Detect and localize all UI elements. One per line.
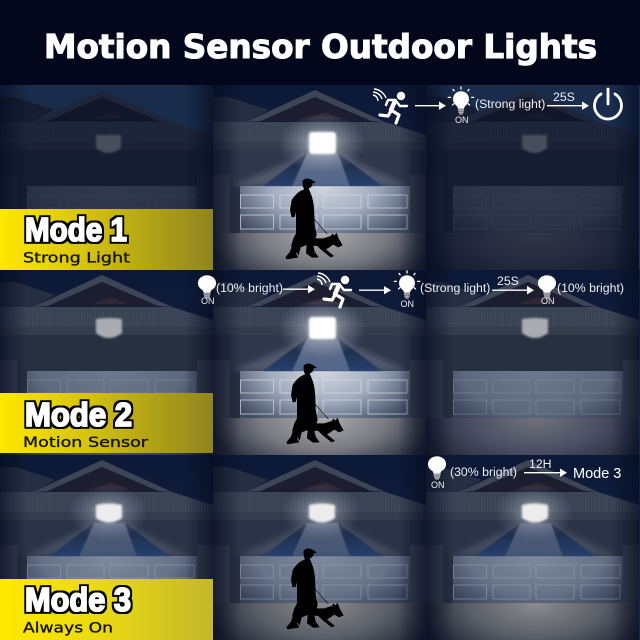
- arrow 12H: [524, 457, 567, 477]
- panel: mode 3 scene centre: [213, 455, 426, 640]
- mode 2 subtitle: Motion Sensor: [23, 435, 148, 451]
- icon: motion runner: [373, 89, 407, 123]
- arrow: [359, 286, 391, 294]
- arrow 25S: 25S: [553, 90, 575, 104]
- panel: mode 2 scene dim again: [426, 270, 640, 455]
- mode 3 subtitle: Always On: [23, 620, 113, 636]
- icon: bulb dim: [538, 275, 556, 298]
- panel: mode 3 scene right: [426, 455, 640, 640]
- label: 10% bright: (10% bright): [557, 281, 624, 295]
- banner: mode 3: [0, 579, 213, 640]
- label: on: ON: [400, 299, 414, 309]
- label: mode 3: Mode 3: [573, 466, 621, 482]
- icon: power: [594, 89, 622, 119]
- arrow 12H: 12H: [529, 457, 552, 471]
- arrow 25S: [547, 90, 589, 110]
- label: 10% bright: (10% bright): [216, 281, 283, 295]
- panel: mode 2 scene triggered: [213, 270, 426, 455]
- icon: bulb strong: [448, 86, 474, 115]
- icon: bulb strong: [394, 270, 420, 299]
- label: on: ON: [431, 480, 444, 490]
- icon: motion runner: [317, 273, 351, 307]
- mode 1 subtitle: Strong Light: [23, 250, 130, 266]
- title: Motion Sensor Outdoor Lights: [44, 28, 597, 66]
- flow: mode 2: [198, 270, 624, 309]
- mode 3 heading: Mode 3: [25, 581, 131, 618]
- panel: mode 2 scene dim: [0, 270, 213, 455]
- silhouette: man and dog, mode 3: [286, 548, 344, 629]
- arrow: [415, 102, 446, 110]
- arrow: [283, 285, 315, 293]
- banner: mode 1: [0, 209, 213, 270]
- label: on: ON: [201, 296, 214, 306]
- banner: mode 2: [0, 393, 213, 453]
- icon: bulb dim: [198, 275, 216, 298]
- label: strong light: (Strong light): [420, 281, 490, 295]
- silhouette: man and dog, mode 2: [286, 363, 344, 444]
- panel: mode 3 scene left: [0, 455, 213, 640]
- panel: mode 1 scene triggered: [213, 85, 426, 270]
- flow: mode 3: [428, 456, 621, 490]
- icon: bulb 30%: [428, 456, 446, 479]
- label: on: ON: [455, 115, 468, 125]
- silhouette: man and dog, mode 1: [285, 178, 343, 259]
- arrow 25S: [492, 274, 534, 294]
- panel: mode 1 scene off: [0, 85, 213, 270]
- mode 1 heading: Mode 1: [25, 211, 127, 248]
- flow: mode 1: [373, 86, 622, 125]
- label: on: ON: [541, 296, 554, 306]
- label: strong light: (Strong light): [475, 97, 545, 111]
- arrow 25S: 25S: [497, 274, 519, 288]
- label: 30% bright: (30% bright): [450, 465, 517, 479]
- panel: mode 1 scene after timeout: [426, 85, 640, 270]
- mode 2 heading: Mode 2: [25, 396, 132, 433]
